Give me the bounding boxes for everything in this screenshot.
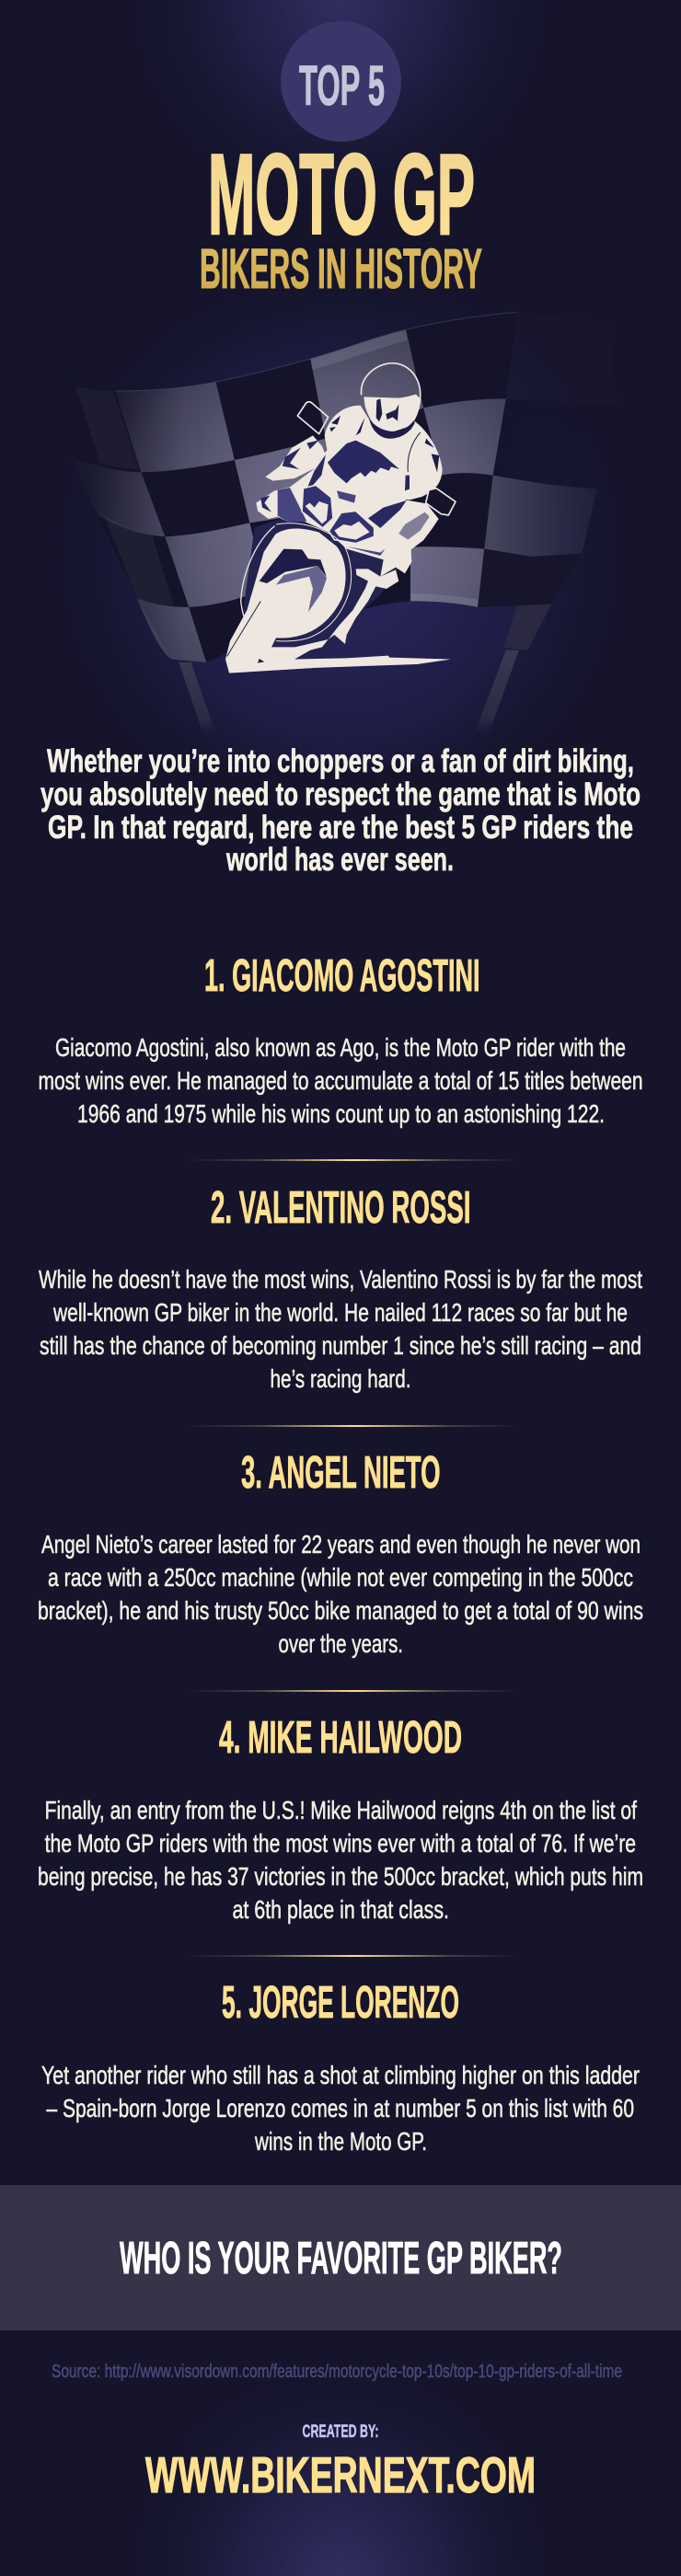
icon: flag poles [179,650,519,734]
panel: rider 3 [38,1447,643,1658]
header badge: top 5 [281,21,401,142]
front wheel outlines [241,523,352,641]
icon: headlights [302,485,375,544]
heading: Jorge Lorenzo: 5. JORGE LORENZO [222,1977,459,2028]
flag cloth [56,312,517,662]
text: rider 5 description: wins in the Moto GP. [254,2127,427,2156]
text: rider 4 description [38,1796,643,1924]
rider torso and shoulder [325,406,443,500]
fender and tyre [225,529,346,673]
panel: rider 4 [38,1712,643,1924]
ground shadow streak [276,656,451,670]
credit label: CREATED BY: [302,2422,379,2442]
panel: rider 2 [39,1182,642,1393]
fender wedges [227,549,327,663]
text: rider 1 description [39,1033,642,1128]
checker squares [72,329,506,662]
panel: rider 1 [39,950,642,1128]
header badge: top 5: TOP 5 [299,54,385,117]
right flag wing [478,312,617,650]
fairing blue panels [260,440,430,556]
fairing [256,436,439,566]
text: rider 3 description: over the years. [278,1629,403,1658]
foot and fork [329,569,398,644]
icon: left mirror [297,402,329,434]
icon: helmet [362,363,421,434]
helmet visor and chin details [329,397,439,472]
intro paragraph: world has ever seen. [225,842,454,878]
heading: Mike Hailwood: 4. MIKE HAILWOOD [219,1712,462,1763]
heading: Angel Nieto: 3. ANGEL NIETO [241,1447,440,1498]
text: rider 4 description: at 6th place in that class. [232,1895,449,1924]
cloth fold highlights [76,329,478,607]
title [200,132,482,300]
text: rider 2 description [39,1265,642,1393]
text: rider 2 description: he’s racing hard. [271,1364,410,1393]
right forearm lower [380,559,411,577]
panel: rider 5 [41,1977,640,2156]
flag top edge highlight [115,312,517,391]
text: rider 5 description [41,2061,640,2156]
rider left arm [265,435,326,481]
heading: Valentino Rossi: 2. VALENTINO ROSSI [211,1182,471,1233]
text: rider 3 description [38,1530,643,1658]
bike shadow body [242,512,402,642]
illustration: checkered flags [56,312,617,734]
intro paragraph [40,743,641,878]
call to action band [0,2185,681,2330]
left side shading [56,382,209,662]
icon: right mirror [426,489,456,515]
illustration: motorcycle racer [225,363,456,673]
